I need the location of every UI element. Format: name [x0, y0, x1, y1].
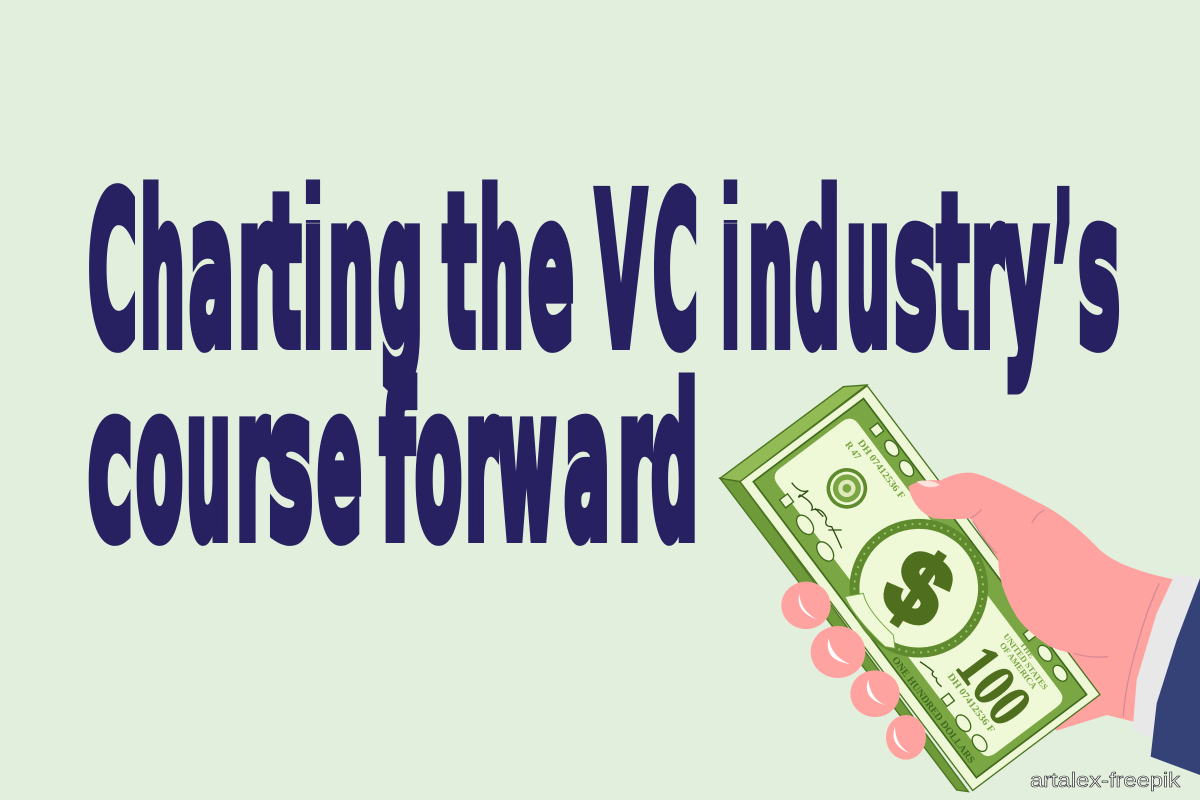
- title: u: [186, 345, 231, 585]
- title: g: [378, 152, 423, 392]
- title: n: [748, 152, 793, 392]
- bill: left border ornaments: [779, 488, 990, 759]
- bill: One Hundred Dollars: ONE HUNDRED DOLLARS: [889, 655, 977, 766]
- title: t: [443, 152, 476, 392]
- bill: ribbon: [845, 593, 895, 648]
- title: i: [721, 152, 740, 392]
- bill: 100: 100: [943, 633, 1046, 738]
- hand: thumbnail: [917, 481, 940, 487]
- text: s: [1078, 152, 1120, 392]
- title: r: [238, 152, 271, 392]
- icon: dollar sign: $: [864, 526, 973, 650]
- title: y: [1003, 152, 1048, 392]
- bill: Of America: OF AMERICA: [998, 640, 1040, 691]
- bill: serial number top: DH 07412536 F: [855, 438, 907, 502]
- title: n: [328, 152, 374, 392]
- title: s: [894, 152, 937, 392]
- title: i: [303, 152, 323, 392]
- bill: signatures: [792, 483, 942, 687]
- title: a: [189, 152, 234, 392]
- title: o: [415, 345, 462, 585]
- title: u: [846, 152, 890, 392]
- bill: inner panel: [771, 414, 1066, 761]
- jacket sleeve: [1151, 578, 1200, 775]
- hand: fingers: [781, 582, 926, 760]
- title: t: [937, 152, 969, 392]
- title: w: [497, 345, 556, 585]
- hand: lower palm behind bill: [1033, 579, 1173, 731]
- title: c: [88, 345, 133, 585]
- title: h: [479, 152, 524, 392]
- bill: R47: R 47: [842, 440, 863, 462]
- title: r: [465, 345, 497, 585]
- credit: artalex-freepik: artalex-freepik: [1030, 770, 1181, 792]
- hand: fingernail highlights: [799, 593, 910, 753]
- title: C: [653, 152, 698, 392]
- title: s: [268, 345, 313, 585]
- title: r: [971, 152, 1003, 392]
- hand: thumb and palm over bill: [908, 473, 1174, 722]
- title: C: [88, 152, 137, 392]
- title: r: [618, 345, 651, 585]
- bill: The: THE: [1018, 640, 1037, 660]
- title: e: [317, 345, 362, 585]
- title: ’: [1053, 152, 1073, 392]
- title: d: [795, 152, 840, 392]
- title: e: [528, 152, 574, 392]
- shirt cuff: [1133, 574, 1200, 738]
- title: o: [136, 345, 183, 585]
- bill: serial number bottom: DH 07412536 F: [945, 671, 997, 735]
- bill: seal: [818, 460, 875, 517]
- bill: stack edges: [720, 385, 968, 792]
- illustration: hand holding a 100 dollar bill: [720, 385, 1200, 792]
- title: [88, 152, 1120, 585]
- bill: face: [740, 386, 1100, 790]
- title: a: [564, 345, 610, 585]
- bill: central medallion: [822, 491, 1016, 685]
- bill: right border ornaments: [869, 422, 1071, 684]
- title: d: [651, 345, 698, 585]
- title: f: [380, 345, 415, 585]
- hand: creases: [970, 509, 1159, 717]
- title: V: [596, 152, 646, 392]
- title: h: [140, 152, 185, 392]
- title: r: [236, 345, 269, 585]
- bill: United States: UNITED STATES: [1001, 631, 1050, 692]
- title: t: [268, 152, 301, 392]
